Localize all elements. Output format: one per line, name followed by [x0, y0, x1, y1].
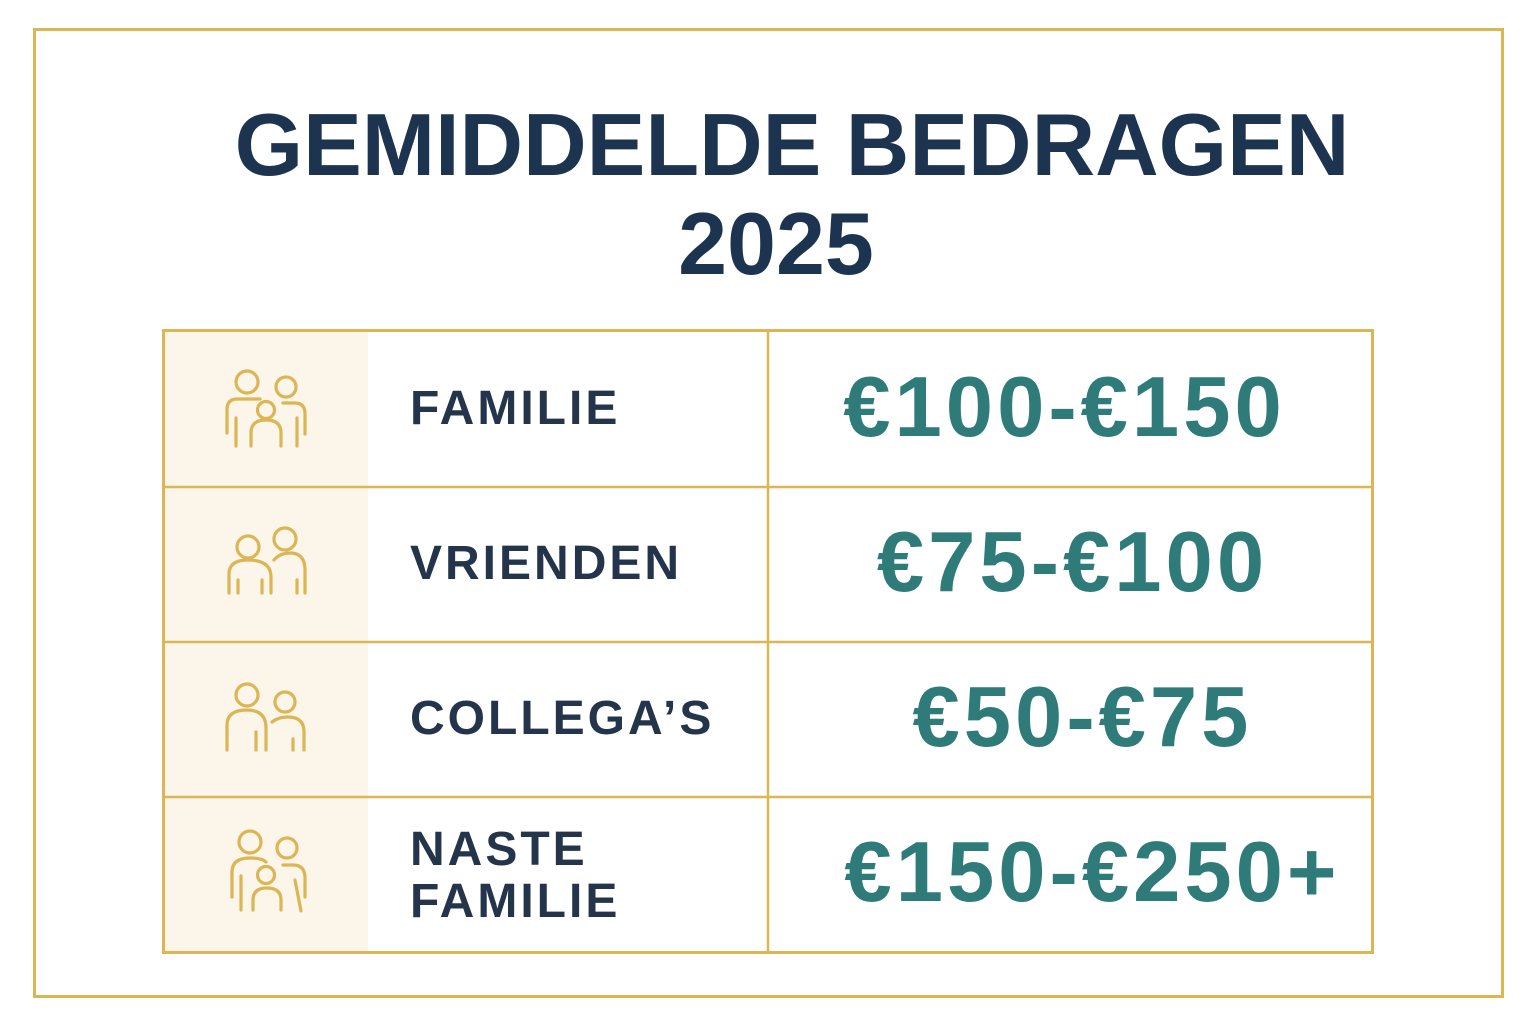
label: naaste familie: NASTE	[410, 823, 588, 876]
value: naaste familie: €150-€250+	[844, 825, 1341, 920]
table	[162, 329, 1374, 954]
label: familie: FAMILIE	[410, 382, 620, 435]
icon: family	[227, 371, 305, 446]
icon: colleagues	[227, 684, 304, 750]
label: vrienden: VRIENDEN	[410, 537, 682, 590]
value: collega's: €50-€75	[913, 670, 1252, 765]
icon: friends	[229, 528, 305, 593]
value: familie: €100-€150	[843, 360, 1286, 455]
title line 1: GEMIDDELDE BEDRAGEN	[235, 95, 1349, 194]
label: naaste familie	[410, 823, 620, 928]
value: vrienden: €75-€100	[877, 515, 1268, 610]
icon: close family	[232, 831, 305, 911]
label: naaste familie: FAMILIE	[410, 875, 620, 928]
label: collega's: COLLEGA’S	[410, 692, 714, 745]
title line 2: 2025	[678, 194, 874, 293]
